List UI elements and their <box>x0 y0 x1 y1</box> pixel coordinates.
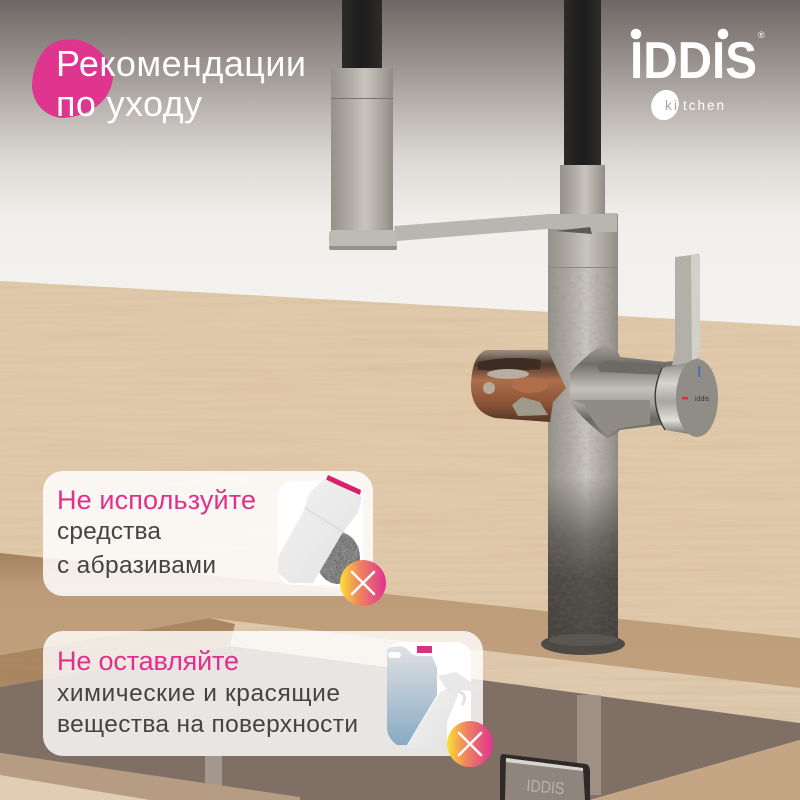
lever <box>672 254 700 365</box>
badge: prohibited <box>447 721 493 767</box>
spout collar <box>560 165 605 214</box>
warning text <box>57 646 358 738</box>
handle cylinder <box>570 343 680 438</box>
warning text <box>57 485 256 579</box>
title: по уходу <box>56 83 202 124</box>
spray head <box>329 68 397 250</box>
background: front counter <box>0 740 800 800</box>
warning text: средства <box>57 518 161 545</box>
warning text: Не используйте <box>57 485 256 515</box>
background: wooden backsplash <box>0 270 800 650</box>
badge: prohibited <box>340 560 386 606</box>
spout arm <box>394 213 617 241</box>
right black hose <box>564 0 601 166</box>
warning text: с абразивами <box>57 552 216 579</box>
title: Рекомендации <box>56 43 306 84</box>
left black hose <box>342 0 382 69</box>
rusted side valve <box>471 350 566 422</box>
faucet <box>329 0 718 655</box>
illustration: cleaning powder and steel wool <box>278 475 364 586</box>
logo: k <box>665 98 672 113</box>
card: abrasives warning <box>43 471 386 606</box>
handle cap: iddis <box>695 396 710 403</box>
sink drain badge <box>500 754 590 800</box>
logo: i <box>674 98 677 113</box>
card: chemicals warning <box>43 631 493 767</box>
logo: IDDIS <box>630 32 757 90</box>
warning text: вещества на поверхности <box>57 711 358 738</box>
background: countertop front edge <box>0 618 800 723</box>
sink drain badge: IDDIS <box>526 776 565 798</box>
background: countertop surface <box>0 553 800 700</box>
background: kitchen wall <box>0 0 800 340</box>
warning text: химические и красящие <box>57 680 340 707</box>
warning text: Не оставляйте <box>57 646 239 676</box>
logo: tchen <box>683 98 724 113</box>
logo: ® <box>758 30 765 40</box>
title blob <box>32 39 113 118</box>
illustration: canister and spray bottle <box>387 642 480 748</box>
background: steel sink <box>0 646 800 800</box>
faucet base <box>541 633 625 655</box>
logo <box>630 29 765 125</box>
handle cap <box>655 359 718 437</box>
faucet body <box>548 214 618 638</box>
